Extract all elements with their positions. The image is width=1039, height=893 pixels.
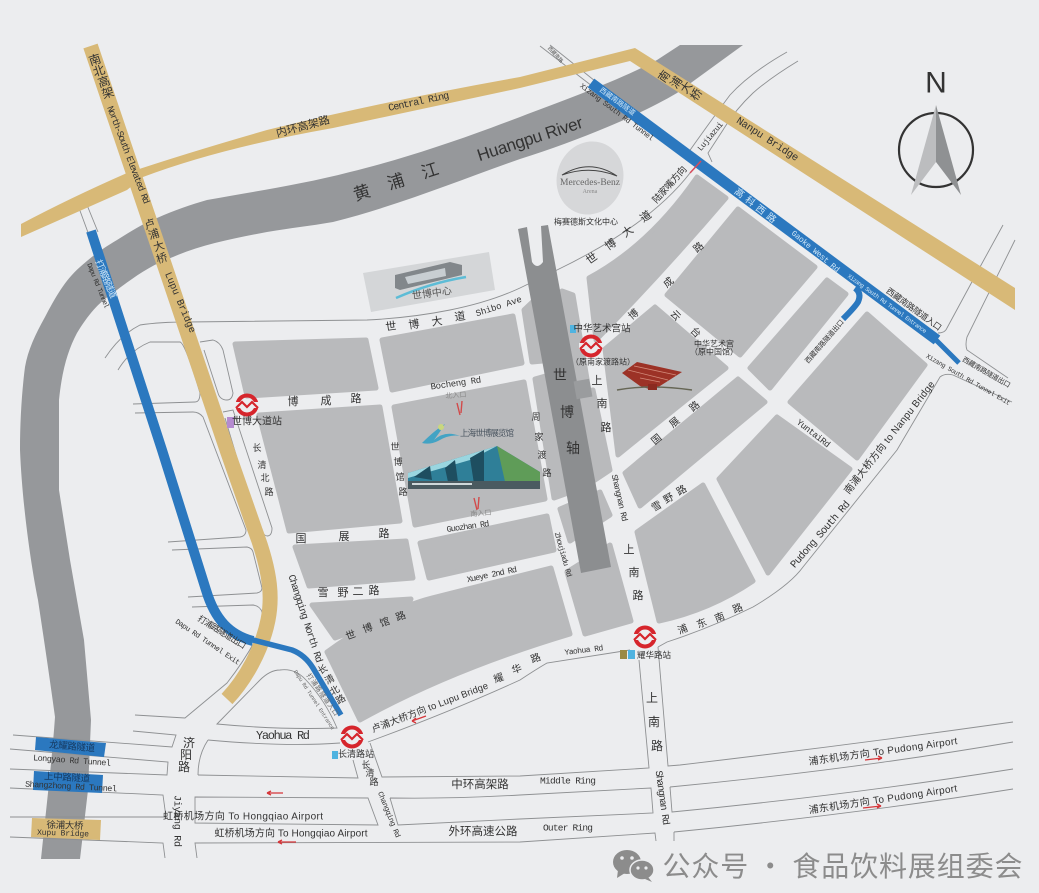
panel: Expo Center: 世博中心 <box>411 284 453 302</box>
road labels: south-west: Changqing Rd <box>375 791 401 839</box>
road labels: east block: 路 <box>651 738 663 753</box>
road labels: east block: 南 <box>596 397 608 410</box>
road labels: west block: 二 <box>352 586 364 598</box>
road labels: west block: 渡 <box>537 449 547 460</box>
road labels: east block: 大 <box>619 222 636 240</box>
label: Huangpu River <box>351 113 586 205</box>
panel: Mercedes-Benz Arena: Arena <box>583 189 598 195</box>
tunnel label: Longyao Road: 龙耀路隧道 <box>49 739 96 755</box>
label: Huangpu River: 黄 <box>351 181 373 205</box>
road labels: west block: 雪 <box>318 586 328 599</box>
road labels: east block: Zhoujiadu Rd <box>552 532 572 578</box>
road labels: west block: 周 <box>531 412 541 422</box>
road labels: west block: 路 <box>398 486 408 497</box>
road labels: west block: 路 <box>394 608 408 624</box>
road labels: south-west: 虹桥机场方向 To Hongqiao Airport <box>163 810 323 822</box>
labels: Xizang tunnel and Nanpu Bridge: 大 <box>677 78 695 96</box>
exhibition hall building <box>408 446 540 489</box>
label: Dapu Road Tunnel <box>84 258 120 310</box>
road labels: west block: 馆 <box>378 614 392 630</box>
axis: Expo Axis: 博 <box>560 404 574 420</box>
road labels: south-west: 清 <box>365 767 375 778</box>
road labels: east block: 浦东机场方向 To Pudong Airport <box>808 781 958 817</box>
panel: Mercedes-Benz Arena: Mercedes-Benz <box>560 178 620 188</box>
label: Lupu Bridge: 桥 <box>155 251 169 266</box>
bridge label: Xupu Bridge: Xupu Bridge <box>37 829 89 839</box>
road labels: west block: 博 <box>288 395 298 408</box>
compass <box>899 66 973 195</box>
label: Lupu Bridge: 卢 <box>143 217 157 232</box>
China Pavilion: （原中国馆） <box>690 346 738 356</box>
labels: Xizang tunnel and Nanpu Bridge: 桥 <box>688 86 705 103</box>
south entrance arrows: 南入口 <box>470 508 492 518</box>
China Pavilion: 中华艺术宫 <box>694 338 734 348</box>
north entrance arrows: 北入口 <box>445 391 467 400</box>
road labels: east block: 上 <box>646 691 658 705</box>
labels: Xizang tunnel and Nanpu Bridge: Xizang South Rd Tunnel Exit <box>925 353 1011 407</box>
road labels: south-west: Middle Ring <box>540 776 596 786</box>
road labels: west block <box>252 295 552 707</box>
road labels: east block: 东 <box>695 615 709 631</box>
road labels: south-west: 外环高速公路 <box>448 824 518 838</box>
road labels: west block: Bocheng Rd <box>430 375 482 393</box>
road labels: east block: 成 <box>661 275 676 290</box>
labels: Xizang tunnel and Nanpu Bridge: 南 <box>655 68 673 85</box>
labels: Xizang tunnel and Nanpu Bridge: 高科西路 <box>732 185 779 226</box>
metro station: Changqing Road <box>332 728 374 759</box>
road labels: west block: 博 <box>361 620 375 636</box>
road labels: south-west: 卢浦大桥方向 to Lupu Bridge <box>370 680 490 735</box>
road labels: south-west: 路 <box>178 759 190 774</box>
road labels: south-west: 耀 <box>492 671 506 686</box>
road labels: east block: 南 <box>713 609 727 625</box>
label: Dapu Road Tunnel: Dapu Rd Tunnel <box>84 262 110 310</box>
road labels: east block <box>552 207 958 826</box>
road labels: south-west: Jiyang Rd <box>170 795 182 847</box>
road labels: south-west: 阳 <box>180 748 192 762</box>
direction arrows <box>267 716 882 844</box>
label: Lupu Bridge: 浦 <box>147 227 161 242</box>
watermark: 公众号 · 食品饮料展组委会 <box>662 845 1022 885</box>
road labels: east block: 国 <box>649 432 664 447</box>
tunnel label: Longyao Road: Longyao Rd Tunnel <box>33 753 111 769</box>
exhibition hall logo <box>422 424 514 444</box>
road labels: west block: 馆 <box>395 471 405 482</box>
road labels: east block: 路 <box>690 239 706 255</box>
road labels: south-west: 路 <box>369 776 379 787</box>
metro station: Yaohua Road: 耀华路站 <box>637 650 671 660</box>
road labels: west block: 路 <box>264 486 274 497</box>
road labels: south-west: 济 <box>183 735 195 750</box>
road labels: east block: 台 <box>688 324 704 340</box>
panel: Mercedes-Benz Arena <box>546 132 634 226</box>
road labels: west block: Xueye 2nd Rd <box>466 565 518 585</box>
metro station: Shibo Avenue <box>227 396 282 428</box>
road labels: east block: 展 <box>667 415 682 430</box>
labels: Xizang tunnel and Nanpu Bridge: 西藏南路隧道 <box>598 85 637 117</box>
labels: Xizang tunnel and Nanpu Bridge: Lujiazui <box>696 121 726 153</box>
label: Dapu Road Tunnel: 打浦路隧道 <box>93 258 120 300</box>
tunnel: Xizang South Road (blue) <box>591 83 959 363</box>
labels: Xizang tunnel and Nanpu Bridge: 浦 <box>668 74 685 91</box>
road labels: west block: 博 <box>393 456 403 467</box>
tunnel: Dapu Road exit (blue) <box>253 640 341 715</box>
road labels: east block: 博 <box>625 306 641 322</box>
road labels: east block: 雪 <box>649 499 664 514</box>
road labels: west block: 路 <box>542 467 552 478</box>
panel: Mercedes-Benz Arena: 梅赛德斯文化中心 <box>554 216 618 226</box>
road labels: west block: 世 <box>385 319 397 334</box>
metro station: Shibo Avenue: 世博大道站 <box>232 414 282 428</box>
road labels: east block: Pudong South Rd <box>789 499 853 571</box>
road labels: east block: 路 <box>731 600 745 616</box>
metro station: China Art Museum <box>570 322 635 366</box>
label: North-South Elevated Road: 架 <box>100 84 116 102</box>
label: Lupu Bridge: 大 <box>151 238 166 254</box>
road labels: west block: 清 <box>323 672 337 687</box>
tunnel label: Shangzhong Road: Shangzhong Rd Tunnel <box>25 780 117 794</box>
road labels: east block: 浦 <box>676 621 690 637</box>
labels: Xizang tunnel and Nanpu Bridge: 西藏南路 <box>546 45 565 64</box>
metro station: China Art Museum: 中华艺术宫站 <box>573 322 631 334</box>
road: Lupu Bridge and North-South Elevated Road <box>90 46 270 699</box>
road labels: east block: 路 <box>686 398 702 414</box>
axis: Expo Axis: 轴 <box>566 440 580 456</box>
label: North-South Elevated Road: 高 <box>96 73 112 91</box>
label: North-South Elevated Road: North-South Elevated Rd <box>104 104 152 206</box>
tunnel label: Shangzhong Road <box>25 770 117 794</box>
road labels: east block: 南 <box>648 714 660 729</box>
road labels: west block: 大 <box>430 313 443 329</box>
road labels: west block: Changqing North Rd <box>285 573 324 664</box>
road labels: south-west: Yaohua Rd <box>564 644 604 658</box>
river: Huangpu River <box>20 45 743 859</box>
label: Central Ring: 内环高架路 <box>274 112 331 140</box>
label: Lupu Bridge <box>143 217 198 335</box>
road labels: south-west: 长 <box>361 759 371 770</box>
bridge label: Xupu Bridge <box>31 818 101 840</box>
axis: Expo Axis: 世 <box>553 367 567 383</box>
road labels: west block: 家 <box>534 431 544 442</box>
road labels: west block: Shibo Ave <box>475 295 523 319</box>
north entrance arrows <box>445 391 467 415</box>
road labels: west block: 展 <box>338 530 350 543</box>
metro station: Yaohua Road <box>620 628 671 660</box>
road labels: east block: 博 <box>602 236 619 253</box>
label: Huangpu River: 江 <box>419 159 441 183</box>
labels: Xizang tunnel and Nanpu Bridge: Nanpu Bridge <box>734 115 800 165</box>
road labels: west block: 路 <box>334 692 348 707</box>
road: Central Ring and Nanpu Bridge <box>21 48 1015 310</box>
road labels: west block: 世 <box>390 441 400 452</box>
labels: Xizang tunnel and Nanpu Bridge: 陆家嘴方向 <box>650 164 689 206</box>
label: Dapu Road Tunnel Entrance: Dapu Rd Tunnel Entrance <box>292 669 336 731</box>
label: Lupu Bridge: Lupu Bridge <box>161 271 198 335</box>
road labels: south-west: 华 <box>510 661 524 677</box>
metro station: China Art Museum: （原南家渡路站） <box>571 356 635 366</box>
road labels: west block: 路 <box>368 584 380 597</box>
road labels: west block: 世 <box>344 628 358 643</box>
tunnel label: Shangzhong Road: 上中路隧道 <box>44 770 91 785</box>
labels: Xizang tunnel and Nanpu Bridge <box>546 45 1012 407</box>
labels: Xizang tunnel and Nanpu Bridge: 西藏南路隧道出口 <box>961 355 1012 390</box>
tunnel: Dapu Road (blue) <box>91 231 253 641</box>
label: Dapu Road Tunnel Entrance: 打浦路隧道入口 <box>305 671 341 717</box>
road labels: east block: 云 <box>668 309 682 323</box>
road labels: west block: 长 <box>316 662 330 677</box>
road labels: west block: Guozhan Rd <box>446 519 490 535</box>
road labels: west block: 道 <box>453 308 466 324</box>
road labels: west block: 博 <box>408 317 420 332</box>
road labels: west block: 清 <box>257 459 267 470</box>
road labels: east block: 路 <box>600 421 612 434</box>
road labels: east block: 上 <box>592 374 602 387</box>
road labels: west block: 路 <box>378 527 390 540</box>
road labels: south-west: Yaohua Rd <box>256 729 310 743</box>
road labels: east block: 浦东机场方向 To Pudong Airport <box>808 734 958 768</box>
road labels: east block: 道 <box>637 207 654 225</box>
south entrance arrows <box>470 497 492 518</box>
label: North-South Elevated Road: 北 <box>91 62 107 80</box>
axis: Expo Axis <box>518 225 611 573</box>
road labels: east block: 南浦大桥方向 to Nanpu Bridge <box>841 378 938 497</box>
road labels: east block: YuntaiRd <box>794 418 832 450</box>
road labels: east block: Shangnan Rd <box>609 473 629 523</box>
road labels: west block: 野 <box>338 586 348 599</box>
label: Central Ring <box>274 90 450 140</box>
road labels: south-west: Outer Ring <box>543 822 593 834</box>
road labels: east block: Shangnan Rd <box>652 770 671 826</box>
panel: Expo Center <box>363 252 495 312</box>
labels: Xizang tunnel and Nanpu Bridge: 西藏南路隧道入口 <box>884 286 944 332</box>
China Pavilion <box>617 338 738 390</box>
road labels: west block: 北 <box>328 684 342 698</box>
labels: Xizang tunnel and Nanpu Bridge: Xizang South Rd Tunnel <box>578 83 655 144</box>
tunnel label: Longyao Road <box>33 737 111 769</box>
road labels: west block: 长 <box>252 442 262 453</box>
labels: Xizang tunnel and Nanpu Bridge: 西藏南路隧道出口 <box>803 318 846 365</box>
labels: Xizang tunnel and Nanpu Bridge: Gaoke West Rd <box>789 229 841 275</box>
compass: N <box>925 66 947 100</box>
road labels: east block: 世 <box>583 250 600 267</box>
road labels: east block: 南 <box>628 566 640 579</box>
road labels: east block: 路 <box>632 589 644 602</box>
road labels: east block: 野 <box>661 491 676 506</box>
road labels: south-west: 虹桥机场方向 To Hongqiao Airport <box>214 826 368 840</box>
label: Huangpu River: Huangpu River <box>475 113 586 165</box>
road labels: south-west: 路 <box>529 650 543 666</box>
road labels: south-west <box>163 644 604 847</box>
bridge label: Xupu Bridge: 徐浦大桥 <box>46 819 84 832</box>
label: North-South Elevated Road <box>87 51 152 206</box>
label: Dapu Road Tunnel Exit: 打浦路隧道出口 <box>196 613 248 651</box>
metro station: Changqing Road: 长清路站 <box>338 748 374 759</box>
labels: Xizang tunnel and Nanpu Bridge: Xizang South Rd Tunnel Entrance <box>846 273 928 335</box>
label: Central Ring: Central Ring <box>387 90 450 115</box>
road labels: west block: 成 <box>320 394 332 407</box>
road labels: west block: 北 <box>260 473 270 483</box>
label: Dapu Road Tunnel Exit: Dapu Rd Tunnel Exit <box>173 618 241 668</box>
city blocks <box>235 177 925 720</box>
exhibition hall logo: 上海世博展览馆 <box>460 428 514 438</box>
road labels: west block: 国 <box>296 532 306 545</box>
label: Huangpu River: 浦 <box>385 170 407 194</box>
road labels: east block: 上 <box>624 543 634 556</box>
road labels: west block: 路 <box>350 392 362 405</box>
label: North-South Elevated Road: 南 <box>87 51 103 69</box>
road labels: east block: 路 <box>674 482 689 498</box>
road labels: south-west: 中环高架路 <box>451 777 509 791</box>
